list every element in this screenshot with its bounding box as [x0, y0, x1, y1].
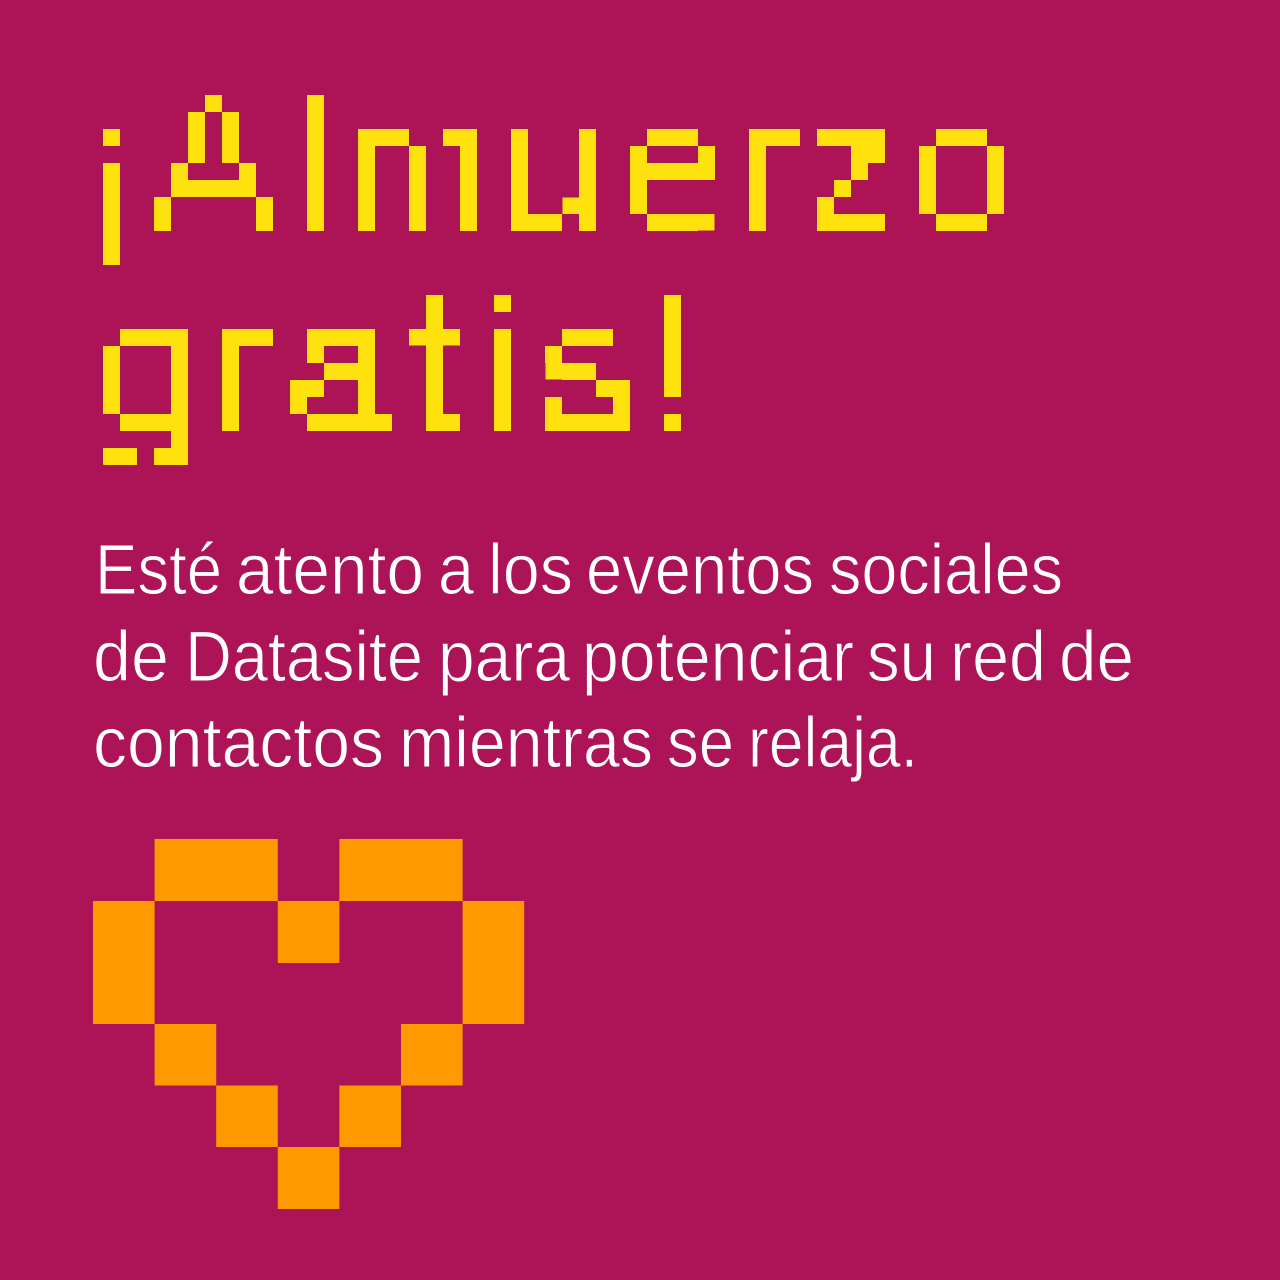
- title line 1: z: [803, 57, 899, 272]
- title line 1: m: [343, 69, 493, 270]
- title: [80, 57, 1015, 475]
- title line 1: ¡: [80, 57, 143, 272]
- body line 1: eventos: [586, 531, 814, 610]
- body line 3: mientras: [399, 704, 653, 783]
- title line 1: o: [908, 57, 1015, 272]
- title line 2: g: [96, 257, 202, 472]
- title line 1: [80, 57, 1015, 272]
- body line 1: sociales: [829, 531, 1063, 610]
- body line 1: a: [438, 531, 474, 610]
- title line 2: i: [481, 257, 524, 472]
- body line 3: relaja.: [748, 704, 918, 783]
- body line 2: de: [93, 618, 169, 697]
- body line 2: su: [867, 618, 936, 697]
- title line 2: !: [646, 257, 699, 472]
- title line 1: e: [619, 57, 726, 272]
- body text: [93, 531, 1134, 783]
- title line 1: l: [294, 57, 337, 272]
- body line 1: los: [488, 531, 573, 610]
- body line 3: se: [667, 704, 734, 783]
- title line 2: [96, 246, 699, 475]
- icon: pixel heart: [93, 839, 524, 1209]
- title line 1: A: [150, 57, 278, 272]
- body line 1: Esté: [95, 531, 222, 610]
- body line 3: contactos: [93, 704, 384, 783]
- title line 2: s: [540, 257, 636, 472]
- title line 2: r: [210, 257, 273, 472]
- body line 1: atento: [236, 531, 424, 610]
- title line 1: r: [736, 57, 800, 272]
- title line 2: a: [288, 257, 395, 472]
- title line 2: t: [405, 246, 462, 475]
- body line 2: Datasite: [185, 618, 423, 697]
- title line 1: u: [498, 57, 605, 272]
- body line 2: de: [1059, 618, 1134, 697]
- body line 2: red: [950, 618, 1046, 697]
- body line 2: para: [438, 618, 570, 697]
- body line 2: potenciar: [582, 618, 854, 697]
